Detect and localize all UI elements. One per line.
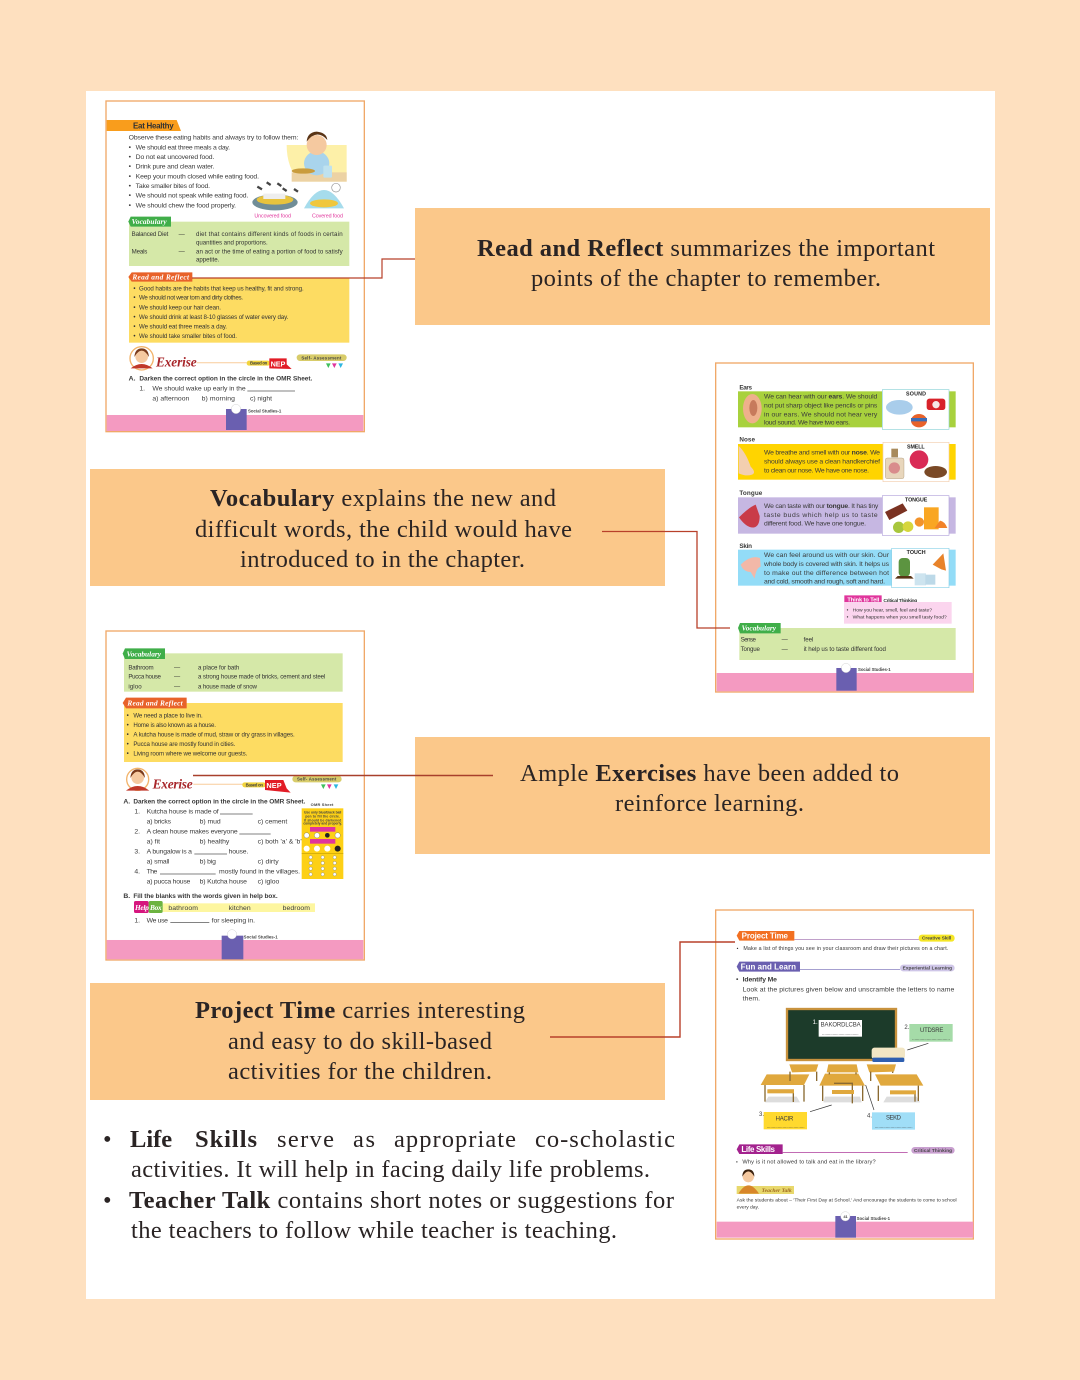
connector: Vocabulary (602, 532, 730, 628)
thumbnail: Exercise page: for sleeping in. (212, 917, 255, 924)
thumbnail: Eat Healthy page: Social Studies-1 (248, 409, 282, 414)
thumbnail: Eat Healthy page: We should eat three meals a day. (139, 323, 227, 330)
thumbnail: Eat Healthy page: Observe these eating habits and always try to follow them: (129, 135, 298, 142)
thumbnail: Exercise page: a house made of snow (198, 683, 258, 690)
thumbnail: Project Time page: UTDSRE (920, 1028, 943, 1034)
thumbnail: Exercise page: b) Kutcha house (200, 879, 247, 886)
callout: Vocabulary: introduced to in the chapter. (240, 546, 525, 573)
thumbnail: Exercise page: It should be darkened (304, 818, 341, 822)
thumbnail: Eat Healthy page: • (129, 144, 132, 151)
thumbnail: Project Time page: Make a list of things you see in your classroom and draw their pictures on a chart. (743, 946, 948, 952)
thumbnail: Eat Healthy page: — (179, 249, 186, 256)
thumbnail: Exercise page: a) fit (147, 838, 160, 845)
callout: Project Time: and easy to do skill-based (228, 1028, 492, 1055)
thumbnail: Exercise page: b) mud (200, 819, 221, 826)
thumbnail: Exercise page: c) igloo (258, 879, 280, 886)
callout: Vocabulary (90, 469, 665, 586)
thumbnail: Exercise page: a) pucca house (147, 879, 191, 886)
thumbnail: Eat Healthy page: Uncovered food (254, 213, 291, 219)
thumbnail: Senses page: Critical Thinking (883, 598, 917, 604)
thumbnail: Exercise page: 3. (134, 849, 140, 856)
thumbnail: Senses page: TONGUE (905, 498, 928, 504)
thumbnail: Eat Healthy page: an act or the time of eating a portion of food to satisfy (196, 249, 344, 256)
thumbnail: Exercise page: kitchen (229, 905, 251, 912)
thumbnail: Project Time page: • (736, 1159, 738, 1165)
thumbnail: Project Time page: ............................... (912, 1035, 950, 1041)
thumbnail: Project Time page: 1. (813, 1020, 818, 1026)
thumbnail: Eat Healthy page: We should take smaller bites of food. (139, 333, 237, 340)
thumbnail: Eat Healthy page: We should wake up early in the (152, 386, 246, 393)
thumbnail: Eat Healthy page: Meals (132, 249, 147, 256)
thumbnail: Eat Healthy page: • (129, 202, 132, 209)
thumbnail: Project Time page: 4. (867, 1113, 872, 1119)
thumbnail: Project Time page: ............................... (822, 1030, 859, 1036)
thumbnail: Exercise page: b) big (200, 859, 216, 866)
thumbnail: Senses page: to make out the difference between hot (764, 570, 889, 577)
thumbnail: Senses page: Think to Tell (847, 598, 880, 604)
thumbnail: Exercise page: house. (229, 849, 248, 856)
thumbnail: Exercise page: a) bricks (147, 819, 172, 826)
thumbnail: Eat Healthy page: Good habits are the habits that keep us healthy, fit and strong. (139, 285, 304, 292)
thumbnail: Exercise page: Kutcha house is made of (147, 809, 219, 816)
thumbnail: Exercise page: bathroom (168, 905, 198, 912)
thumbnail: Eat Healthy page: Covered food (312, 213, 343, 219)
thumbnail: Eat Healthy page: We should keep our hair clean. (139, 304, 221, 311)
thumbnail: Eat Healthy page: Take smaller bites of food. (136, 183, 210, 190)
thumbnail: Senses page: SOUND (906, 391, 926, 397)
thumbnail: Exercise page: — (174, 664, 181, 671)
thumbnail: Senses page: Nose (739, 436, 755, 443)
callout: Exercises (415, 737, 990, 854)
thumbnail: Exercise page: c) both 'a' & 'b' (258, 838, 302, 845)
thumbnail: Exercise page: A. (123, 798, 130, 805)
callout: Read and Reflect: points of the chapter to remember. (531, 265, 881, 292)
thumbnail: Eat Healthy page: Vocabulary (132, 217, 167, 226)
thumbnail: Exercise page: Home is also known as a house. (133, 722, 216, 729)
thumbnail: Project Time page: Project Time (742, 932, 789, 941)
thumbnail: Senses page: TOUCH (907, 550, 926, 556)
thumbnail: Project Time page: HACIR (776, 1116, 794, 1122)
connector: Project Time (550, 942, 735, 1037)
thumbnail: Eat Healthy page: Darken the correct option in the circle in the OMR Sheet. (139, 375, 313, 382)
callout: Vocabulary: Vocabulary explains the new and (210, 485, 556, 512)
thumbnail: Project Time page: BAKORDLCBA (821, 1023, 861, 1029)
thumbnail: Senses page: • (847, 607, 849, 613)
thumbnail: Eat Healthy page (106, 101, 364, 432)
thumbnail: Senses page: We breathe and smell with our nose. We (764, 450, 880, 457)
thumbnail: Senses page: — (782, 646, 789, 653)
thumbnail: Exercise page: 1. (134, 809, 140, 816)
thumbnail: Exercise page: a place for bath (198, 664, 240, 671)
thumbnail: Project Time page: 3. (759, 1112, 764, 1118)
thumbnail: Exercise page: • (127, 741, 129, 748)
thumbnail: Eat Healthy page: • (133, 333, 135, 340)
text block: Life Skills and Teacher Talk: activities. It will help in facing daily life problems. (131, 1156, 650, 1183)
thumbnail: Eat Healthy page: Exerise (155, 355, 197, 370)
thumbnail: Project Time page: • (737, 946, 739, 952)
thumbnail: Exercise page: Read and Reflect (126, 698, 184, 707)
thumbnail: Exercise page: bedroom (283, 905, 310, 912)
thumbnail: Eat Healthy page: • (133, 304, 135, 311)
thumbnail: Project Time page: 2. (904, 1025, 910, 1031)
thumbnail: Eat Healthy page: Read and Reflect (131, 272, 190, 281)
thumbnail: Exercise page: 2. (134, 829, 140, 836)
thumbnail: Exercise page: • (127, 722, 129, 729)
thumbnail: Project Time page: 41 (843, 1214, 849, 1219)
thumbnail: Project Time page: Life Skills (741, 1145, 776, 1154)
thumbnail: Exercise page: Living room where we welcome our guests. (133, 751, 248, 758)
text block: Life Skills and Teacher Talk: appropriate (394, 1126, 516, 1153)
thumbnail: Exercise page: Based on (246, 782, 263, 787)
thumbnail: Exercise page: 1. (134, 917, 140, 924)
thumbnail: Exercise page: c) dirty (258, 859, 279, 866)
thumbnail: Project Time page: SEKD (886, 1116, 902, 1122)
thumbnail: Exercise page (106, 631, 364, 960)
thumbnail: Exercise page: The (147, 869, 158, 876)
thumbnail: Senses page (716, 363, 973, 692)
thumbnail: Exercise page: Fill the blanks with the words given in help box. (133, 893, 278, 900)
thumbnail: Exercise page: Exerise (152, 776, 193, 791)
thumbnail: Exercise page: OMR Sheet (311, 802, 334, 807)
thumbnail: Exercise page: Self- Assessment (297, 777, 337, 782)
thumbnail: Eat Healthy page: • (129, 173, 132, 180)
thumbnail: Project Time page: Teacher Talk (762, 1188, 792, 1194)
thumbnail: Eat Healthy page: We should drink at least 8-10 glasses of water every day. (139, 314, 289, 321)
thumbnail: Project Time page: Critical Thinking (914, 1148, 952, 1153)
thumbnail: Eat Healthy page: • (133, 295, 135, 302)
thumbnail: Senses page: What happens when you smell tasty food? (853, 615, 947, 621)
thumbnail: Eat Healthy page: A. (129, 375, 136, 382)
thumbnail: Exercise page: A bungalow is a (147, 849, 192, 856)
thumbnail: Eat Healthy page: appetite. (196, 257, 220, 264)
thumbnail: Senses page: in our ears. We should not hear very (764, 411, 878, 418)
callout: Exercises: reinforce learning. (615, 790, 804, 817)
thumbnail: Senses page: Tongue (741, 646, 761, 653)
thumbnail: Exercise page: igloo (128, 683, 142, 690)
thumbnail: Senses page: Ears (739, 384, 752, 391)
text block: Life Skills and Teacher Talk: Teacher Talk contains short notes or suggestions for (129, 1187, 674, 1214)
thumbnail: Exercise page: Vocabulary (127, 649, 162, 658)
thumbnail: Senses page: whole body is covered with skin. It helps us (763, 561, 890, 568)
thumbnail: Senses page: not put sharp object like pencils or pins (764, 402, 878, 409)
thumbnail: Senses page: feel (804, 637, 813, 644)
thumbnail: Eat Healthy page: • (129, 193, 132, 200)
thumbnail: Senses page: taste buds which help us to taste (764, 512, 878, 519)
thumbnail: Senses page: loud sound. We have two ears. (764, 420, 850, 427)
thumbnail: Exercise page: Help Box (134, 903, 162, 912)
thumbnail: Senses page: Social Studies-1 (858, 667, 891, 672)
text block: Life Skills and Teacher Talk: • (103, 1187, 112, 1214)
thumbnail: Eat Healthy page: a) afternoon (152, 396, 190, 403)
thumbnail: Eat Healthy page: • (129, 164, 132, 171)
thumbnail: Project Time page (716, 910, 973, 1239)
thumbnail: Eat Healthy page: • (129, 154, 132, 161)
thumbnail: Project Time page: Social Studies-1 (857, 1216, 891, 1221)
thumbnail: Exercise page: pen to fill the circle. (305, 814, 340, 818)
thumbnail: Exercise page: Use only blue/black ball (304, 810, 341, 814)
thumbnail: Eat Healthy page: • (133, 314, 135, 321)
thumbnail: Senses page: We can taste with our tongue. It has tiny (764, 503, 879, 510)
thumbnail: Exercise page: • (127, 751, 129, 758)
thumbnail: Project Time page: Look at the pictures given below and unscramble the letters to name (743, 987, 955, 994)
text block: Life Skills and Teacher Talk: • (103, 1126, 112, 1153)
thumbnail: Exercise page: We need a place to live in. (133, 713, 203, 720)
thumbnail: Eat Healthy page: b) morning (202, 396, 235, 403)
callout: Read and Reflect: Read and Reflect summarizes the important (477, 235, 935, 262)
white panel (86, 91, 995, 1299)
thumbnail: Project Time page: them. (743, 996, 760, 1003)
thumbnail: Senses page: We can hear with our ears. We should (764, 393, 878, 400)
thumbnail: Exercise page: Social Studies-1 (244, 934, 278, 939)
text block: Life Skills and Teacher Talk: co-scholastic (535, 1126, 675, 1153)
text block: Life Skills and Teacher Talk: serve (277, 1126, 334, 1153)
thumbnail: Eat Healthy page: Based on (250, 361, 268, 366)
thumbnail: Project Time page: Experiential Learning (903, 966, 952, 971)
connector: Exercises (193, 774, 493, 776)
thumbnail: Project Time page: ............................... (767, 1123, 805, 1129)
thumbnail: Eat Healthy page: quantities and proportions. (196, 239, 268, 246)
thumbnail: Project Time page: ............................... (875, 1123, 913, 1129)
callout: Project Time: activities for the children. (228, 1058, 492, 1085)
thumbnail: Eat Healthy page: Keep your mouth closed while eating food. (136, 173, 259, 180)
thumbnail: Senses page: We can feel around us with our skin. Our (764, 552, 890, 559)
callout: Project Time (90, 983, 665, 1100)
thumbnail: Eat Healthy page: Self- Assessment (301, 355, 342, 360)
thumbnail: Eat Healthy page: diet that contains different kinds of foods in certain (196, 231, 343, 238)
thumbnail: Project Time page: Identify Me (743, 976, 777, 983)
connector: Read and Reflect (192, 259, 415, 278)
thumbnail: Exercise page: b) healthy (200, 838, 230, 845)
thumbnail: Exercise page: • (127, 713, 129, 720)
thumbnail: Eat Healthy page: We should chew the food properly. (136, 202, 236, 209)
text block: Life Skills and Teacher Talk: Skills (195, 1126, 257, 1153)
thumbnail: Eat Healthy page: — (179, 231, 186, 238)
thumbnail: Exercise page: completely and properly. (303, 822, 342, 826)
callout: Read and Reflect (415, 208, 990, 325)
thumbnail: Exercise page: a) small (147, 859, 170, 866)
thumbnail: Senses page: to clean our nose. We have one nose. (764, 467, 869, 474)
thumbnail: Senses page: Sense (741, 637, 757, 644)
thumbnail: Senses page: different food. We have one tongue. (764, 521, 866, 528)
text block: Life Skills and Teacher Talk: Life (130, 1126, 172, 1153)
callout: Vocabulary: difficult words, the child would have (195, 516, 572, 543)
thumbnail: Eat Healthy page: • (129, 183, 132, 190)
callout: Project Time: Project Time carries interesting (195, 997, 525, 1024)
text block: Life Skills and Teacher Talk (103, 1126, 675, 1244)
thumbnail: Project Time page: Fun and Learn (741, 962, 796, 971)
text block: Life Skills and Teacher Talk: as (353, 1126, 375, 1153)
thumbnail: Eat Healthy page: 1. (139, 386, 145, 393)
thumbnail: Eat Healthy page: NEP (271, 359, 285, 368)
thumbnail: Senses page: How you hear, smell, feel and taste? (853, 607, 932, 613)
thumbnail: Eat Healthy page: Balanced Diet (132, 231, 169, 238)
thumbnail: Senses page: — (782, 637, 789, 644)
text block: Life Skills and Teacher Talk: the teachers to follow while teacher is teaching. (131, 1217, 617, 1244)
thumbnail: Eat Healthy page: We should not wear torn and dirty clothes. (139, 295, 243, 302)
thumbnail: Senses page: SMELL (907, 445, 925, 451)
thumbnail: Project Time page: Creative Skill (922, 936, 951, 941)
thumbnail: Eat Healthy page: We should not speak while eating food. (136, 193, 248, 200)
thumbnail: Exercise page: NEP (266, 781, 282, 790)
thumbnail: Eat Healthy page: c) night (250, 396, 272, 403)
thumbnail: Project Time page: Ask the students about – 'Their First Day at School.' And encourage the students to come to school (737, 1198, 957, 1204)
thumbnail: Exercise page: — (174, 683, 181, 690)
thumbnail: Exercise page: Darken the correct option in the circle in the OMR Sheet. (133, 798, 306, 805)
thumbnail: Exercise page: A kutcha house is made of mud, straw or dry grass in villages. (133, 732, 295, 739)
thumbnail: Senses page: should always use a clean handkerchief (764, 458, 880, 465)
thumbnail: Project Time page: • (736, 976, 739, 983)
thumbnail: Eat Healthy page: We should eat three meals a day. (136, 144, 230, 151)
thumbnail: Exercise page: — (174, 674, 181, 681)
thumbnail: Eat Healthy page: • (133, 285, 135, 292)
thumbnail: Exercise page: • (127, 732, 129, 739)
thumbnail: Senses page: Skin (739, 543, 752, 550)
thumbnail: Project Time page: every day. (737, 1205, 759, 1211)
callout: Exercises: Ample Exercises have been added to (520, 760, 899, 787)
thumbnail: Exercise page: Pucca house (128, 674, 162, 681)
thumbnail: Exercise page: Pucca house are mostly found in cities. (133, 741, 236, 748)
thumbnail: Senses page: • (847, 615, 849, 621)
thumbnail: Exercise page: We use (147, 917, 168, 924)
thumbnail: Senses page: and cold, smooth and rough, soft and hard. (764, 579, 885, 586)
thumbnail: Eat Healthy page: Eat Healthy (133, 121, 174, 130)
thumbnail: Exercise page: B. (123, 893, 130, 900)
thumbnail: Eat Healthy page: • (133, 323, 135, 330)
thumbnail: Exercise page: a strong house made of bricks, cement and steel (198, 674, 325, 681)
thumbnail: Exercise page: A clean house makes everyone (147, 829, 238, 836)
thumbnail: Senses page: Tongue (739, 490, 763, 497)
thumbnail: Exercise page: Bathroom (128, 664, 154, 671)
thumbnail: Eat Healthy page: Do not eat uncovered food. (136, 154, 214, 161)
thumbnail: Project Time page: Why is it not allowed to talk and eat in the library? (742, 1159, 876, 1165)
thumbnail: Exercise page: c) cement (258, 819, 287, 826)
thumbnail: Senses page: Vocabulary (742, 624, 777, 633)
thumbnail: Eat Healthy page: Drink pure and clean water. (136, 164, 214, 171)
thumbnail: Exercise page: 4. (134, 869, 140, 876)
thumbnail: Exercise page: mostly found in the villages. (219, 869, 300, 876)
thumbnail: Senses page: it help us to taste different food (804, 646, 887, 653)
